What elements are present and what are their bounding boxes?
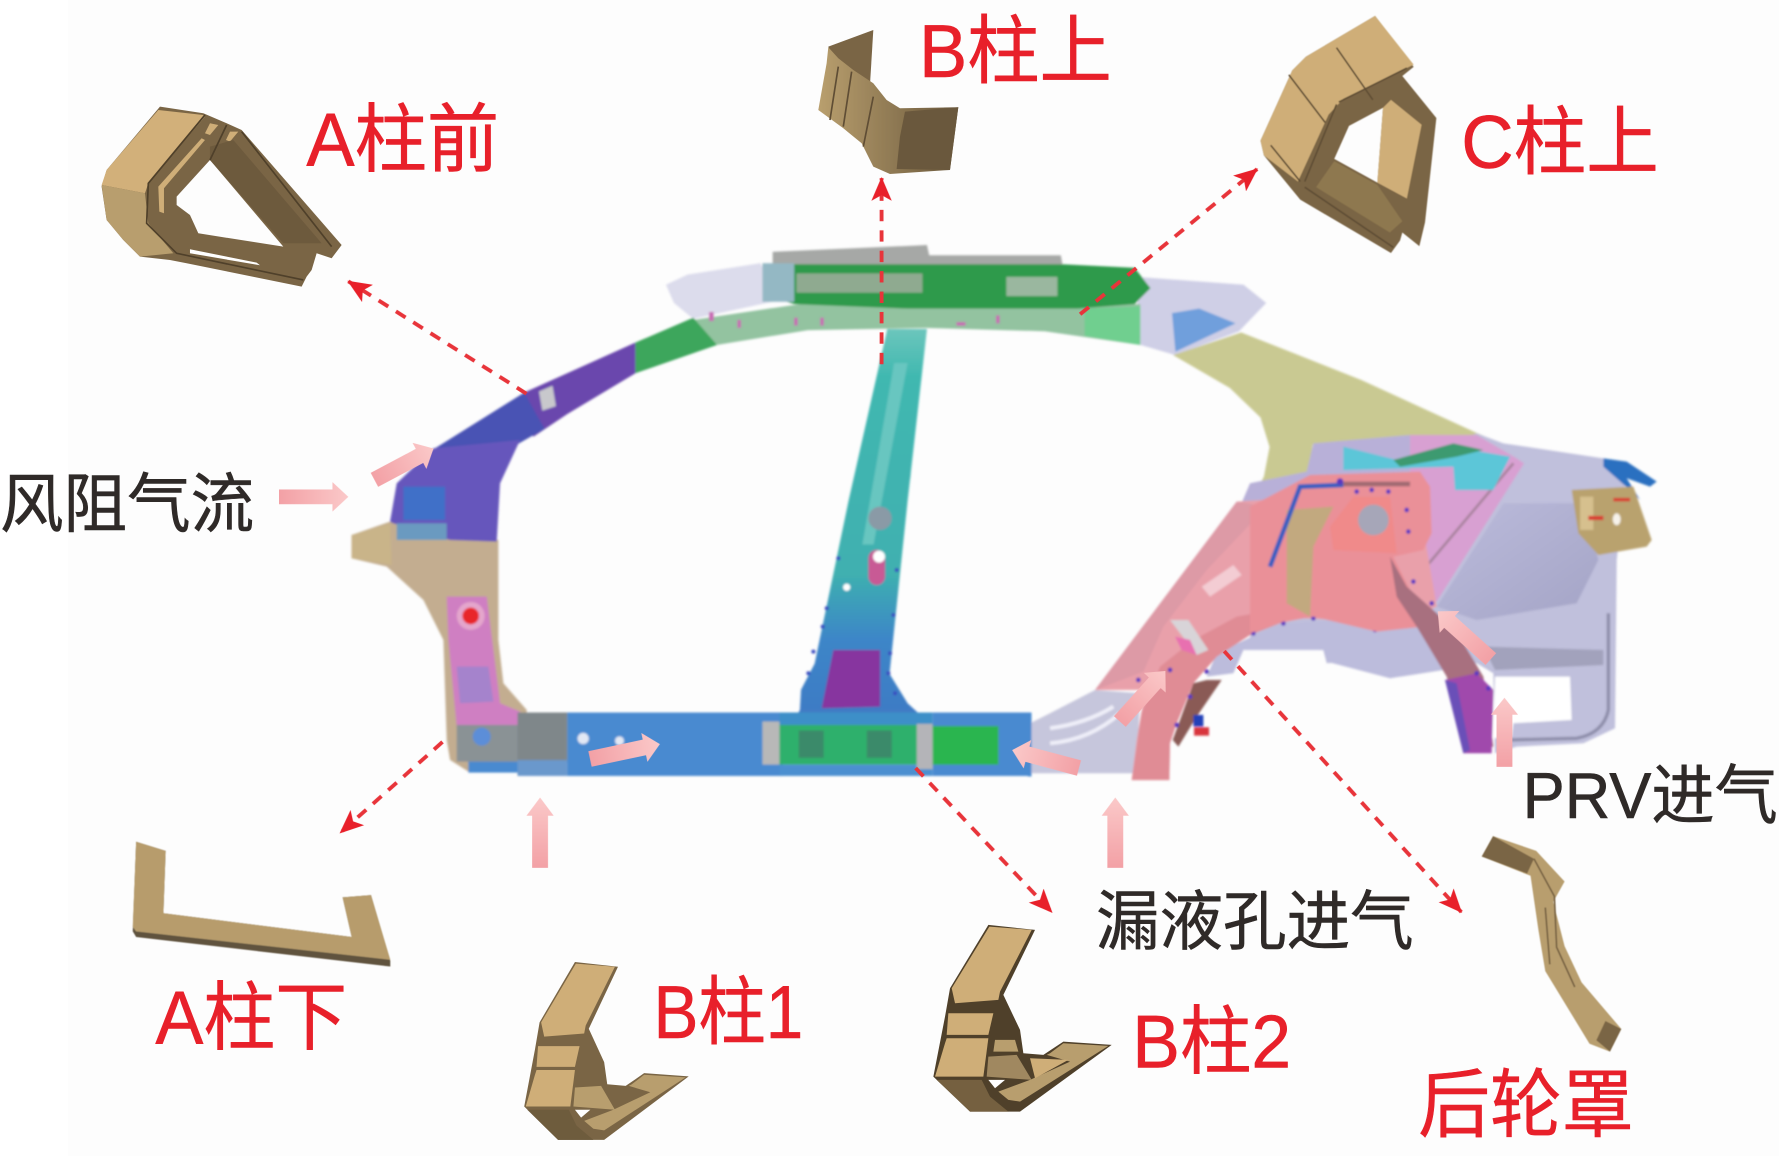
roof front lavender end	[666, 263, 783, 319]
dashed arrow: to rear wheelhouse	[1224, 651, 1461, 912]
rear arch band	[1390, 557, 1493, 750]
purple reinforcement	[822, 650, 880, 708]
dashed arrow: to A pillar lower	[340, 742, 442, 833]
sill blue rear	[933, 712, 1031, 776]
dots arch	[1136, 616, 1377, 727]
bracket hole	[1613, 513, 1621, 525]
inner arch lavender	[1207, 620, 1443, 678]
label: PRV intake: PRV进气	[1523, 759, 1778, 832]
label: A pillar lower: A柱下	[155, 976, 347, 1060]
A pillar blue	[391, 393, 545, 545]
blue clip	[1193, 715, 1203, 727]
roof rear blue patch	[1172, 309, 1236, 352]
dots	[1337, 478, 1491, 691]
airflow arrow: up rear	[1102, 798, 1129, 868]
dashed arrow: to B pillar 2	[916, 768, 1052, 912]
part: B pillar baffle 2	[933, 925, 1112, 1112]
label: A pillar front: A柱前	[306, 98, 499, 182]
pale stripes	[1202, 565, 1242, 597]
sill green dark patch 2	[867, 731, 892, 758]
roof rail front green	[635, 318, 717, 373]
roof rear lavender end	[1136, 277, 1266, 355]
green streak	[1393, 443, 1483, 467]
airflow arrow: drag diagonal	[367, 435, 440, 493]
car body side structure	[352, 245, 1657, 780]
airflow arrow: drag horizontal	[279, 482, 348, 512]
olive patch	[1287, 507, 1333, 617]
dashed arrow: to A pillar front	[348, 281, 526, 394]
quarter lower band	[1483, 647, 1603, 670]
sill blue main	[567, 712, 783, 776]
sunroof frame green	[773, 264, 1150, 309]
sill gray front	[517, 712, 567, 762]
sill holes	[577, 733, 589, 744]
gray spot	[868, 507, 892, 530]
white stripes	[1170, 620, 1208, 655]
hinge upper purple	[390, 440, 520, 542]
quarter light panel	[1250, 433, 1627, 753]
sunroof blue-grey end	[762, 263, 794, 302]
pink bracket panel	[1250, 472, 1433, 633]
sill gray joint rear	[917, 724, 933, 769]
roof rail rear green	[1085, 306, 1140, 345]
label: B pillar 1: B柱1	[654, 970, 803, 1054]
hinge pink	[447, 597, 520, 727]
violet edge	[1445, 680, 1470, 753]
part: B pillar baffle 1	[524, 962, 689, 1140]
hinge tan	[352, 522, 527, 772]
wheelhouse pink outer	[1095, 490, 1437, 780]
rear quarter pink group	[1250, 472, 1493, 753]
pink slot	[868, 550, 885, 585]
diagonal rib	[1423, 463, 1513, 570]
part: rear wheelhouse baffle	[1482, 836, 1621, 1052]
sill teal upper band	[779, 712, 933, 725]
B pillar inner highlight	[862, 363, 908, 545]
hinge bracket	[352, 523, 392, 565]
strut bracket	[1330, 497, 1397, 553]
sill highlight	[1050, 707, 1120, 743]
label: drag airflow: 风阻气流	[0, 467, 254, 540]
bracket red marks	[1588, 516, 1603, 520]
window cut-out in quarter	[1493, 677, 1572, 738]
label: C pillar upper: C柱上	[1461, 100, 1659, 184]
A pillar light joint	[539, 386, 556, 411]
airflow arrow: front sill	[587, 730, 663, 773]
hinge blue patch	[403, 487, 445, 520]
taillight bracket	[1572, 487, 1652, 555]
strut tower	[1358, 505, 1389, 535]
magenta band	[1393, 435, 1524, 602]
dashed arrow: to C pillar upper	[1080, 169, 1257, 314]
B pillar	[783, 329, 930, 737]
sill blue lower strip	[517, 760, 567, 776]
sill green rear	[933, 726, 998, 765]
hinge blue ring	[473, 728, 491, 746]
sill green	[779, 724, 997, 765]
quarter frame line	[1510, 613, 1608, 740]
airflow arrow: PRV	[1491, 698, 1518, 767]
blue spoiler	[1603, 458, 1657, 500]
hinge violet	[457, 667, 493, 703]
sill hole 2	[615, 736, 624, 745]
wheel arch group	[1020, 490, 1443, 780]
blue weld trail	[1270, 485, 1343, 567]
upper lavender strip	[1240, 435, 1410, 507]
label: B pillar 2: B柱2	[1132, 1000, 1291, 1084]
magenta smear	[1175, 637, 1197, 655]
B pillar detail group	[806, 507, 899, 708]
part: C pillar upper baffle	[1261, 16, 1436, 253]
top dark strip	[1343, 482, 1410, 486]
label: B pillar upper: B柱上	[919, 9, 1112, 93]
sunroof gray inset front	[796, 273, 922, 293]
sunroof frame gray	[773, 245, 1063, 268]
A pillar upper purple	[524, 343, 635, 437]
sunroof gray inset rear	[1006, 277, 1057, 296]
red clip	[1194, 727, 1209, 736]
small hole	[843, 584, 850, 591]
cyan patch	[1343, 447, 1510, 490]
C pillar olive panel	[1173, 332, 1485, 490]
hinge red dot	[462, 608, 479, 624]
dots	[806, 556, 899, 695]
hinge teal strip	[397, 523, 447, 540]
hinge blue strip	[468, 762, 532, 773]
part: B pillar upper baffle	[818, 30, 958, 174]
part: A pillar front baffle	[102, 107, 342, 287]
hinge halo	[457, 602, 485, 630]
sill lower band	[779, 765, 933, 776]
rear door sill lavender	[1020, 690, 1140, 773]
label: rear wheelhouse: 后轮罩	[1418, 1063, 1634, 1147]
hinge gray block	[457, 725, 530, 762]
quarter window panel	[1437, 503, 1598, 620]
wheelhouse edge darker	[1095, 502, 1267, 690]
purple lower arch	[1445, 673, 1493, 753]
dashed arrow: to B pillar upper	[880, 178, 883, 364]
airflow arrow: up front	[526, 798, 554, 868]
airflow arrow: rear arch	[1428, 600, 1501, 670]
roof marks	[709, 312, 1000, 328]
sill green dark patches	[799, 731, 824, 758]
bracket red mark upper	[1613, 498, 1630, 501]
slot highlight	[873, 551, 885, 563]
airflow arrow: rear sill	[1008, 736, 1083, 782]
rear quarter group	[1240, 433, 1657, 753]
roof rail	[693, 304, 1140, 345]
sill gray joint front	[762, 722, 779, 765]
airflow arrow: wheel arch	[1109, 661, 1176, 731]
bracket light inner	[1580, 497, 1593, 530]
part: A pillar lower baffle	[133, 842, 390, 967]
hinge pillar group	[352, 440, 532, 773]
label: drain hole intake: 漏液孔进气	[1096, 885, 1414, 958]
dark liner	[1173, 680, 1222, 747]
arch darker rim	[1132, 608, 1283, 780]
